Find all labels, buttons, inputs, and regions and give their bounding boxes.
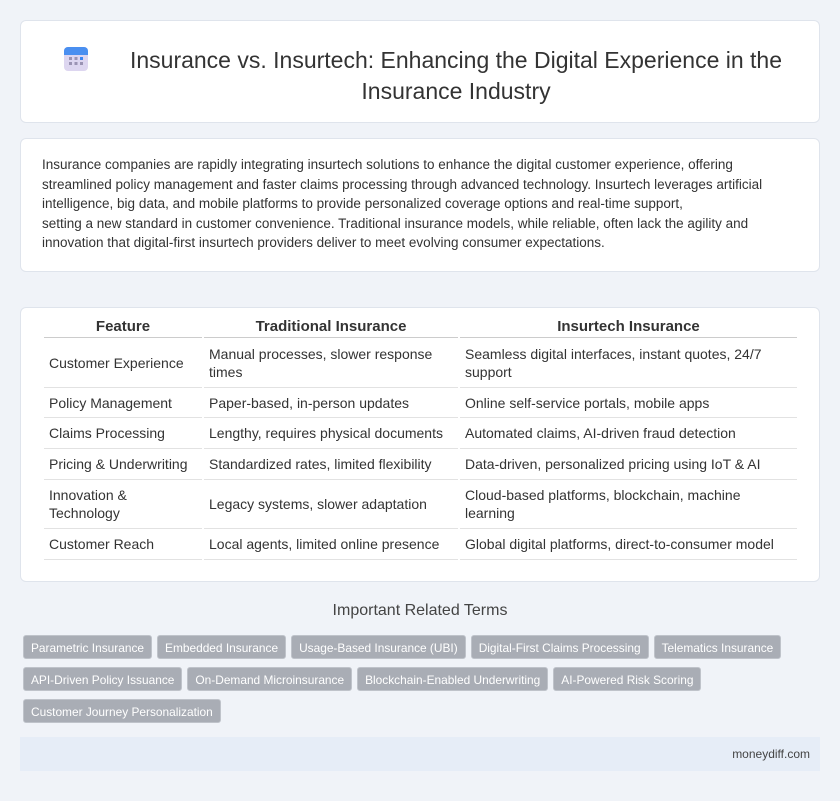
tags: On-Demand Microinsurance <box>195 673 344 687</box>
comparison table: Customer Experience <box>49 354 184 370</box>
tags <box>23 635 781 723</box>
comparison table: Legacy systems, slower adaptation <box>209 496 427 512</box>
comparison table: Feature <box>96 318 150 335</box>
comparison table: Data-driven, personalized pricing using IoT & AI <box>465 456 760 472</box>
comparison table: Customer Reach <box>49 536 154 552</box>
intro text: streamlined policy management and faster claims processing through advanced technology. Insurtech leverages artificial <box>42 176 762 192</box>
comparison table: Paper-based, in-person updates <box>209 394 409 410</box>
intro text <box>20 138 820 272</box>
title: Insurance vs. Insurtech: Enhancing the Digital Experience in the Insurance Industry <box>130 47 782 104</box>
tags: Embedded Insurance <box>165 641 278 655</box>
tags: Blockchain-Enabled Underwriting <box>365 673 540 687</box>
tags: Digital-First Claims Processing <box>479 641 641 655</box>
comparison table: Seamless digital interfaces, instant quotes, 24/7 support <box>465 346 762 380</box>
comparison table: Traditional Insurance <box>256 318 406 335</box>
header card <box>20 20 820 123</box>
tags: Telematics Insurance <box>662 641 773 655</box>
comparison table: Insurtech Insurance <box>557 318 700 335</box>
tags: Customer Journey Personalization <box>31 705 213 719</box>
footer <box>20 737 820 771</box>
tags: Parametric Insurance <box>31 641 144 655</box>
comparison table <box>20 307 820 582</box>
comparison table: Standardized rates, limited flexibility <box>209 456 432 472</box>
comparison table: Lengthy, requires physical documents <box>209 425 443 441</box>
comparison table: Innovation & Technology <box>49 487 127 521</box>
related terms heading: Important Related Terms <box>333 602 507 619</box>
comparison table: Online self-service portals, mobile apps <box>465 394 709 410</box>
comparison table: Policy Management <box>49 394 172 410</box>
intro text: Insurance companies are rapidly integrating insurtech solutions to enhance the digital customer experience, offering <box>42 157 733 172</box>
intro text: setting a new standard in customer convenience. Traditional insurance models, while reliable, often lack the agility and <box>42 216 748 230</box>
intro text: innovation that digital-first insurtech providers deliver to meet evolving consumer expectations. <box>42 235 605 250</box>
icon: calendar <box>64 47 88 71</box>
tags: API-Driven Policy Issuance <box>31 673 174 687</box>
comparison table: Local agents, limited online presence <box>209 536 439 552</box>
intro text: intelligence, big data, and mobile platforms to provide personalized coverage options and real-time support, <box>42 196 683 211</box>
comparison table: Pricing & Underwriting <box>49 456 188 472</box>
comparison table: Cloud-based platforms, blockchain, machine learning <box>465 487 740 521</box>
footer: moneydiff.com <box>732 747 810 761</box>
comparison table: Manual processes, slower response times <box>209 346 432 380</box>
tags: Usage-Based Insurance (UBI) <box>299 641 458 655</box>
comparison table: Automated claims, AI-driven fraud detection <box>465 425 736 441</box>
comparison table: Claims Processing <box>49 425 165 441</box>
comparison table: Global digital platforms, direct-to-consumer model <box>465 536 774 552</box>
tags: AI-Powered Risk Scoring <box>561 673 693 687</box>
